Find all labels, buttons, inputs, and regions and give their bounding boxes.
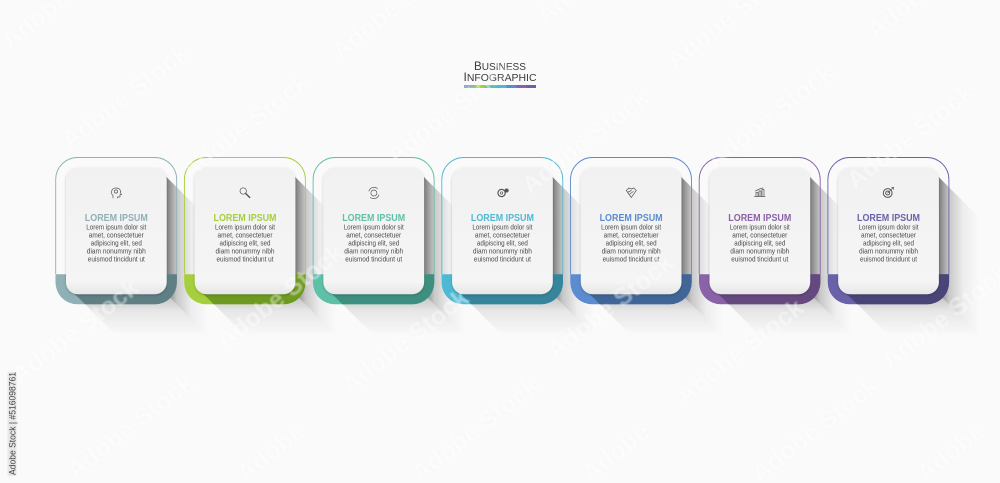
card 4 (442, 158, 594, 336)
body text: euismod tincidunt ut (216, 254, 274, 263)
heading: LOREM IPSUM (214, 213, 276, 224)
long shadow (75, 177, 208, 336)
body text: diam nonummy nibh (730, 246, 789, 255)
body text (601, 222, 661, 263)
icon: rotating coin (369, 187, 379, 199)
outline (56, 158, 177, 274)
outline (699, 158, 820, 274)
long shadow (204, 177, 337, 336)
icon: magnifier (240, 188, 250, 198)
title: INFOGRAPHIC (464, 72, 536, 84)
body text: Lorem ipsum dolor sit (472, 222, 532, 231)
body text: euismod tincidunt ut (88, 254, 145, 263)
body text: euismod tincidunt ut (603, 254, 660, 263)
body text: euismod tincidunt ut (860, 254, 917, 263)
watermark pattern: Adobe Stock (6, 274, 144, 390)
body text: diam nonummy nibh (216, 246, 274, 255)
body text: amet, consectetuer (861, 230, 917, 239)
body text: diam nonummy nibh (344, 246, 403, 255)
coloured base (828, 274, 949, 304)
long shadow (718, 177, 852, 336)
body text: euismod tincidunt ut (731, 254, 788, 263)
inner panel (710, 168, 810, 294)
coloured base (570, 274, 692, 304)
body text: diam nonummy nibh (602, 246, 661, 255)
card 2 (184, 158, 337, 336)
coloured base (442, 274, 563, 304)
body text: amet, consectetuer (346, 230, 402, 239)
outline (828, 158, 949, 274)
watermark pattern: Adobe Stock (336, 284, 474, 400)
watermark pattern: Adobe Stock (541, 249, 679, 365)
watermark pattern: Adobe Stock (516, 84, 654, 200)
watermark pattern: Adobe Stock (841, 79, 979, 195)
body text: adipiscing elit, sed (91, 238, 142, 247)
card 7 (828, 158, 980, 336)
watermark pattern: Adobe Stock (701, 59, 839, 175)
body text: euismod tincidunt ut (345, 254, 402, 263)
body text: amet, consectetuer (89, 230, 144, 239)
icon: bar chart (754, 188, 765, 196)
body text (215, 222, 275, 263)
heading: LOREM IPSUM (600, 213, 663, 224)
watermark pattern: Adobe Stock (381, 54, 519, 170)
long shadow (332, 177, 465, 336)
body text: Lorem ipsum dolor sit (859, 222, 919, 231)
inner panel (195, 168, 295, 294)
body text: Lorem ipsum dolor sit (215, 222, 275, 231)
heading: LOREM IPSUM (342, 213, 405, 224)
icon: head with gear (112, 188, 122, 198)
card 3 (313, 158, 465, 336)
watermark pattern: Adobe Stock (56, 39, 194, 155)
heading: LOREM IPSUM (85, 213, 148, 224)
outline (442, 158, 563, 274)
body text: adipiscing elit, sed (220, 238, 271, 247)
body text: diam nonummy nibh (859, 246, 918, 255)
inner panel (66, 168, 167, 294)
body text: amet, consectetuer (604, 230, 659, 239)
card 1 (56, 158, 208, 336)
inner panel (323, 168, 424, 294)
outline (570, 158, 692, 274)
watermark pattern: Adobe Stock (61, 369, 199, 483)
heading: LOREM IPSUM (471, 213, 534, 224)
body text: euismod tincidunt ut (474, 254, 531, 263)
body text (858, 222, 918, 263)
heading: LOREM IPSUM (728, 213, 791, 224)
long shadow (461, 177, 594, 336)
body text: Lorem ipsum dolor sit (344, 222, 404, 231)
body text: amet, consectetuer (218, 230, 273, 239)
inner panel (838, 168, 939, 294)
body text: Lorem ipsum dolor sit (86, 222, 146, 231)
outline (184, 158, 305, 274)
inner panel (452, 168, 553, 294)
body text: adipiscing elit, sed (477, 238, 528, 247)
body text (86, 222, 146, 263)
body text: amet, consectetuer (732, 230, 788, 239)
body text (730, 222, 790, 263)
icon: handshake (626, 188, 636, 198)
coloured base (313, 274, 434, 304)
title colour bar (464, 85, 536, 88)
body text: adipiscing elit, sed (734, 238, 785, 247)
coloured base (56, 274, 177, 304)
body text: adipiscing elit, sed (863, 238, 914, 247)
body text: adipiscing elit, sed (606, 238, 657, 247)
body text: diam nonummy nibh (87, 246, 146, 255)
body text (344, 222, 404, 263)
outline (313, 158, 434, 274)
body text (472, 222, 532, 263)
icon: gears (498, 189, 508, 197)
body text: Lorem ipsum dolor sit (730, 222, 790, 231)
long shadow (590, 177, 723, 336)
coloured base (184, 274, 306, 304)
heading: LOREM IPSUM (857, 213, 920, 224)
icon: target with arrow (883, 188, 894, 197)
body text: diam nonummy nibh (473, 246, 532, 255)
card 5 (570, 158, 723, 336)
body text: amet, consectetuer (475, 230, 530, 239)
long shadow (847, 177, 980, 336)
title (464, 61, 536, 88)
inner panel (581, 168, 682, 294)
coloured base (699, 274, 820, 304)
watermark pattern: Adobe Stock (211, 239, 349, 355)
body text: adipiscing elit, sed (348, 238, 399, 247)
title: BUSINESS (474, 61, 526, 73)
watermark pattern: Adobe Stock (671, 294, 809, 410)
body text: Lorem ipsum dolor sit (601, 222, 661, 231)
stock id label: Adobe Stock | #516098761 (8, 372, 18, 475)
watermark pattern: Adobe Stock (176, 69, 314, 185)
card 6 (699, 158, 852, 336)
